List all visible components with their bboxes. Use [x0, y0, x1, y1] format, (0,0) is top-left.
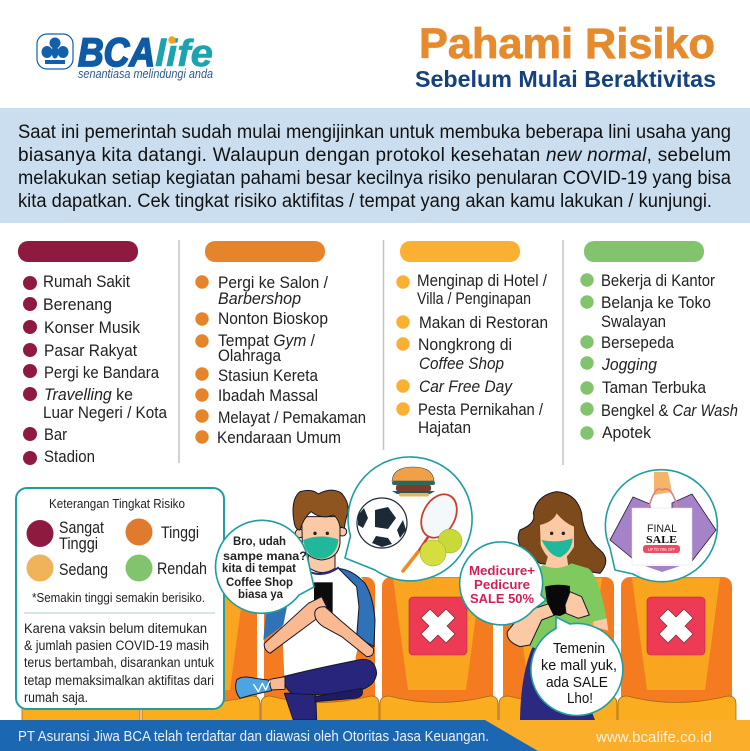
- panel: very high risk list: Pergi ke Bandara: [44, 364, 160, 382]
- panel: medium risk list: Hajatan: [418, 419, 471, 437]
- title: [415, 20, 716, 92]
- panel: very high risk list: [18, 241, 168, 466]
- panel: very high risk list: Travelling ke: [44, 386, 133, 404]
- panel: very high risk list: Stadion: [44, 448, 95, 466]
- legend: sangat tinggi: Tinggi: [59, 535, 98, 553]
- legend advice text: rumah saja.: [24, 690, 88, 705]
- panel: intro text: Saat ini pemerintah sudah mulai mengijinkan untuk membuka beberapa lini usaha yang: [18, 122, 731, 143]
- icon: BCA crest: [37, 34, 73, 69]
- panel: high risk list: Barbershop: [218, 290, 301, 308]
- logo tagline: senantiasa melindungi anda: [78, 67, 213, 81]
- panel: medium risk list: Villa / Penginapan: [417, 290, 531, 308]
- panel: high risk list: Kendaraan Umum: [217, 429, 341, 447]
- panel: medium risk list: Car Free Day: [419, 378, 514, 396]
- illustration: woman with phone: [507, 492, 608, 720]
- risk pill: high: [205, 241, 325, 262]
- panel: medium risk list: Coffee Shop: [419, 355, 504, 373]
- pants: [520, 645, 595, 720]
- neck: [308, 555, 335, 573]
- legend advice text: tetap memaksimalkan aktifitas dari: [24, 673, 214, 688]
- logo wordmark: [78, 31, 213, 75]
- speech bubble: Medicure: Pedicure: [474, 577, 530, 592]
- heading: Pahami Risiko: Pahami Risiko: [419, 20, 715, 68]
- illustration: row of seats: [22, 577, 736, 721]
- panel: intro text: kita dapatkan. Cek tingkat risiko aktifitas / tempat yang akan kamu lakukan / kunjungi.: [18, 191, 712, 212]
- risk pill: very high: [18, 241, 138, 262]
- panel: low risk list: Bersepeda: [601, 334, 675, 352]
- speech bubble: Bro: Bro, udah: [233, 534, 286, 548]
- speech bubble: Temenin: Lho!: [567, 691, 593, 707]
- logo: BCA life: [37, 31, 213, 81]
- legend: sangat tinggi: Sangat: [59, 519, 104, 537]
- illustration: man with phone: [236, 490, 377, 720]
- icon: burger: [392, 467, 435, 496]
- phone: [314, 582, 333, 613]
- hair: [293, 490, 348, 530]
- mask: [542, 538, 573, 557]
- panel: low risk list: Bengkel & Car Wash: [601, 402, 738, 420]
- legend: sangat tinggi: [26, 519, 104, 553]
- panel: medium risk list: Menginap di Hotel /: [417, 272, 547, 290]
- panel: intro text: melakukan setiap kegiatan pahami besar kecilnya risiko penularan COVID-19 yang bisa: [18, 168, 731, 189]
- panel: high risk list: Melayat / Pemakaman: [218, 409, 366, 427]
- phone: [545, 585, 570, 616]
- panel: low risk list: Swalayan: [601, 313, 666, 331]
- legend advice text: [24, 621, 214, 705]
- panel: high risk list: Stasiun Kereta: [218, 367, 319, 385]
- panel: low risk list: Jogging: [601, 356, 658, 374]
- legend: sedang: Sedang: [59, 561, 108, 579]
- icon: shopping bags: [610, 472, 716, 572]
- panel: very high risk list: Pasar Rakyat: [44, 342, 137, 360]
- speech bubble: Temenin: ke mall yuk,: [541, 658, 617, 674]
- speech bubble: Bro: sampe mana?: [223, 549, 307, 563]
- icon: tennis racket: [403, 488, 464, 571]
- right arm: [593, 618, 608, 631]
- legend heading: Keterangan Tingkat Risiko: [49, 496, 185, 511]
- right arm: [315, 607, 374, 657]
- icon: shopping bags: UP TO 70% OFF: [648, 547, 675, 552]
- shoe: [236, 677, 272, 698]
- hair: [518, 492, 606, 573]
- face: [540, 513, 574, 562]
- speech bubble: Temenin: Temenin: [553, 641, 605, 657]
- icon: shopping bags: SALE: [646, 534, 677, 546]
- panel: high risk list: Olahraga: [218, 347, 282, 365]
- legend advice text: terus bertambah, disarankan untuk: [24, 655, 214, 670]
- speech bubble: Bro: kita di tempat: [222, 561, 296, 575]
- panel: high risk list: Nonton Bioskop: [218, 310, 328, 328]
- left arm: [264, 597, 328, 653]
- legend: tinggi: Tinggi: [161, 524, 199, 542]
- icon: no-sit cross right seat: [647, 597, 705, 655]
- risk pill: low: [584, 241, 704, 262]
- legend advice text: & jumlah pasien COVID-19 masih: [24, 638, 209, 653]
- panel: very high risk list: Rumah Sakit: [43, 273, 130, 291]
- legend: tinggi: [126, 518, 199, 546]
- right hand: [565, 592, 589, 618]
- speech bubble: Temenin: ada SALE: [546, 675, 608, 691]
- face: [302, 517, 340, 560]
- panel: medium risk list: Pesta Pernikahan /: [418, 401, 543, 419]
- speech bubble: Medicure: Medicure+: [469, 563, 535, 578]
- footer disclaimer: PT Asuransi Jiwa BCA telah terdaftar dan diawasi oleh Otoritas Jasa Keuangan.: [18, 729, 489, 745]
- speech bubble: shopping thought: [605, 470, 717, 582]
- panel: medium risk list: Nongkrong di: [418, 336, 512, 354]
- legend note: *Semakin tinggi semakin berisiko.: [32, 590, 205, 605]
- panel: medium risk list: Makan di Restoran: [419, 314, 548, 332]
- icon: soccer ball: [357, 498, 407, 548]
- panel: legend: [16, 488, 224, 709]
- speech bubble: Bro: [216, 520, 314, 613]
- speech bubble: Bro: Coffee Shop: [226, 575, 293, 589]
- risk pill: medium: [400, 241, 520, 262]
- icon: tennis balls: [420, 529, 462, 566]
- mask: [303, 536, 338, 559]
- legend: rendah: [126, 554, 207, 582]
- legend advice text: Karena vaksin belum ditemukan: [24, 621, 207, 636]
- footer website: www.bcalife.co.id: [595, 729, 712, 746]
- panel: low risk list: Bekerja di Kantor: [601, 272, 715, 290]
- neck: [545, 555, 568, 571]
- panel: high risk list: Ibadah Massal: [218, 387, 318, 405]
- panel: high risk list: [195, 241, 366, 447]
- panel: very high risk list: Berenang: [43, 296, 112, 314]
- ankle: [270, 677, 285, 690]
- panel: high risk list: Pergi ke Salon /: [218, 274, 328, 292]
- eyes: [550, 532, 553, 535]
- panel: very high risk list: Konser Musik: [44, 319, 141, 337]
- speech bubble: sports thought: [345, 457, 472, 581]
- speech bubble: Bro: biasa ya: [238, 587, 283, 601]
- panel: low risk list: Apotek: [602, 424, 652, 442]
- legend: rendah: Rendah: [157, 560, 207, 578]
- crossed thigh: [283, 659, 377, 695]
- speech bubble: Medicure: SALE 50%: [470, 591, 534, 606]
- logo wordmark: BCA: [78, 31, 155, 75]
- panel: low risk list: [580, 241, 738, 442]
- shirt: [282, 567, 368, 677]
- icon: no-sit cross middle seat: [409, 597, 467, 655]
- panel: intro text: [0, 108, 750, 223]
- logo wordmark: life: [155, 33, 213, 75]
- subheading: Sebelum Mulai Beraktivitas: [415, 66, 716, 92]
- panel: low risk list: Taman Terbuka: [602, 379, 707, 397]
- legend: sedang: [26, 554, 108, 582]
- panel: medium risk list: [396, 241, 548, 437]
- right sleeve: [338, 568, 375, 647]
- left arm: [507, 603, 555, 647]
- thigh shadow: [315, 688, 362, 702]
- collar: [306, 567, 339, 574]
- panel: very high risk list: Bar: [44, 426, 67, 444]
- shirt: [530, 563, 607, 653]
- speech bubble: Temenin: [531, 617, 623, 715]
- footer: [0, 720, 750, 751]
- panel: intro text: biasanya kita datangi. Walaupun dengan protokol kesehatan new normal, sebelum: [18, 145, 731, 166]
- eyes: [313, 532, 317, 535]
- ears: [295, 529, 304, 538]
- final sale label: FINAL: [647, 523, 677, 535]
- lower leg: [284, 693, 317, 720]
- panel: very high risk list: Luar Negeri / Kota: [43, 404, 168, 422]
- panel: low risk list: Belanja ke Toko: [601, 294, 711, 312]
- panel: high risk list: Tempat Gym /: [218, 332, 315, 350]
- left sleeve: [263, 572, 305, 640]
- speech bubble: Medicure: [460, 542, 546, 625]
